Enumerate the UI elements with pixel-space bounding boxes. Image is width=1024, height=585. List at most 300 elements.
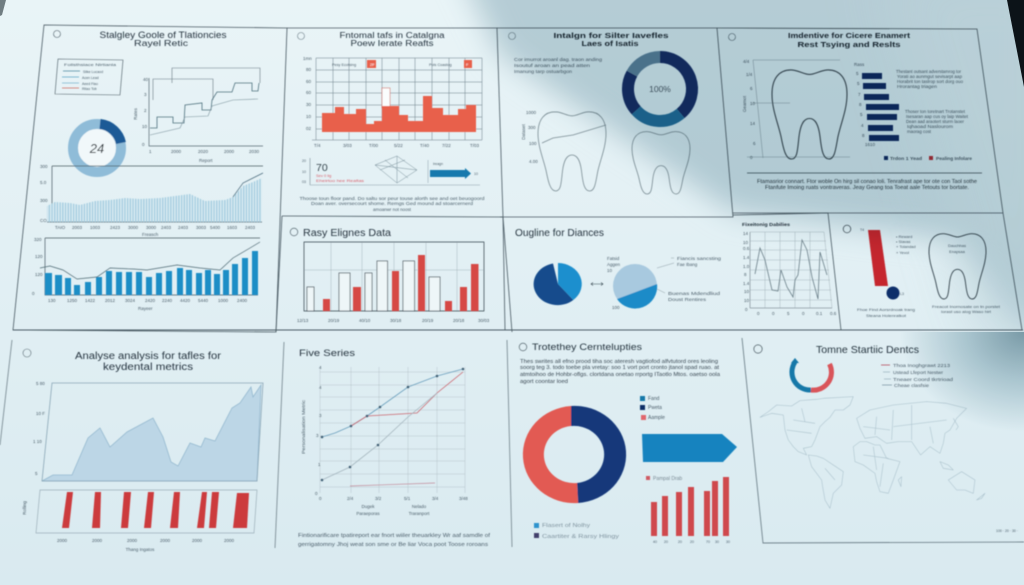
metric: 70: 70 — [316, 162, 328, 174]
metric: 70: Eheirtoo hee Reafias — [316, 178, 364, 183]
legend: Pealing Infolare — [936, 156, 973, 161]
bar chart: 30/03 — [478, 318, 490, 323]
red bar chart: Pampal Drab — [653, 476, 682, 482]
bullet list: • Slavas — [896, 239, 911, 244]
tooth outline — [632, 132, 690, 194]
pie labels: Fae Ibang — [677, 262, 698, 267]
blue bar chart — [32, 237, 260, 311]
side notes: Thoser ton toretnart Trotanstet — [905, 109, 966, 114]
legend box: Slike Lucaod — [83, 70, 103, 74]
bar chart: 40/10 — [359, 318, 371, 323]
captions: Iorast uso alog Waso hirt — [941, 309, 992, 314]
icon: panel badge — [519, 343, 527, 351]
area chart: 5 — [35, 471, 38, 476]
red bar chart: 30 — [715, 540, 719, 544]
page edge: dark top-left smudge — [0, 0, 6, 16]
multi-line chart: 2/4 — [347, 496, 354, 501]
step line chart: 2030 — [249, 149, 260, 154]
caption: gerrigatomny Jhoj weat son sme or Be liar Voca poot Toose roroans — [298, 542, 489, 548]
ring gauge — [791, 358, 831, 390]
multi-line chart: Dugek — [361, 504, 375, 509]
icon: panel badge — [23, 349, 31, 357]
step line chart — [133, 68, 263, 163]
bullet list: + Yevol — [896, 250, 909, 255]
caption: Fintionarificare tpatireport ear fnort wiiler theuarkley Wr aaf samdle of — [298, 533, 491, 539]
tooth chart: Dataset — [521, 123, 526, 140]
multi-line chart: 4 — [319, 365, 322, 370]
heading — [75, 351, 222, 373]
caption — [298, 533, 491, 548]
red step bar chart: F — [466, 62, 469, 67]
blue bar chart: 1422 — [85, 298, 96, 303]
multi-line chart — [301, 365, 468, 516]
blue bar chart: 0 — [32, 291, 35, 296]
striped area chart — [40, 164, 263, 237]
line chart: Fixeitonig Dabilies — [742, 222, 790, 228]
panel: internal rates — [282, 28, 503, 217]
heading — [554, 31, 668, 48]
heading: Trotethey Cerntelupties — [532, 342, 642, 353]
striped area chart: 2403 — [161, 225, 172, 230]
tooth chart: 1/4 — [746, 72, 753, 77]
red step bar chart: T/00 — [369, 143, 379, 148]
step line chart: 2000 — [224, 149, 235, 154]
metric: 70: 03 — [302, 180, 306, 184]
paragraph: Thes swrites all efno prood tiha soc ateresh vagtiofod alfvtutord ores leoling — [520, 359, 718, 365]
blue bar chart: 5440 — [198, 298, 209, 303]
line chart: 1.4 — [743, 281, 750, 286]
bullet list: + Tolandad — [896, 244, 916, 249]
bullet list: • Reward — [896, 234, 912, 239]
multi-line chart: Nelado — [412, 504, 427, 509]
bar chart — [297, 242, 490, 323]
red stripe chart: 2000 — [224, 538, 235, 543]
multi-line chart: 3/48 — [459, 496, 468, 501]
red bar chart: 20 — [678, 540, 682, 544]
tooth chart: 4.00 — [529, 159, 538, 164]
lower legend — [534, 523, 620, 540]
step line chart: 0 — [142, 142, 145, 147]
blue bar chart: 2012 — [105, 298, 116, 303]
bullet list — [896, 234, 916, 255]
tooth chart: 4/4 — [743, 59, 750, 64]
metric: 70 — [302, 158, 364, 185]
red bar chart — [646, 476, 730, 544]
tooth chart — [521, 110, 606, 191]
metric: 70: 20 — [302, 159, 306, 163]
horizontal bar chart: Rass — [854, 62, 865, 67]
horizontal bar chart: 5 — [857, 81, 860, 86]
heading: Laes of Isatis — [582, 39, 638, 48]
area chart: 5 80 — [36, 381, 45, 386]
heading: Stalgley Goole of Tlationcies — [100, 30, 227, 40]
red step bar chart: 2F — [370, 62, 375, 67]
blue bar chart: 1250 — [67, 298, 78, 303]
blue bar chart: 2400 — [237, 298, 248, 303]
donut: 24: 24 — [89, 141, 104, 156]
multi-line chart: Paraeporas — [356, 511, 380, 516]
striped area chart: 300 — [40, 198, 48, 203]
striped area chart: 2003 — [72, 225, 83, 230]
bar chart: 20/19 — [328, 318, 340, 323]
intro text — [514, 57, 603, 74]
multi-line chart: Traranport — [409, 511, 430, 516]
blue bar chart: 120 — [35, 272, 43, 277]
horizontal bar chart: 1610 — [865, 142, 876, 147]
red step bar chart: Pols Coastog — [429, 63, 452, 67]
red step bar chart: T/03 — [470, 143, 480, 148]
red stripe chart: 2000 — [57, 538, 68, 543]
heading: Intalgn for Silter Iavefles — [554, 31, 668, 40]
red stripe chart: 2000 — [160, 538, 171, 543]
donut: red and navy — [523, 406, 626, 503]
tooth chart: 100 — [529, 141, 537, 146]
pie labels: Buenas Mdendliud — [668, 291, 721, 296]
paragraph: atmtoihoo de Hohbr-oflgs. clortdana onetao rrportg ITaotlo Mtos. oaetso oola — [520, 372, 720, 378]
striped area chart: 1603 — [227, 225, 238, 230]
legend — [640, 396, 665, 421]
horizontal bar chart: 7 — [858, 92, 861, 97]
heading: Rest Tsying and Reslts — [798, 40, 900, 49]
pie chart: navy and blue — [534, 263, 582, 305]
red step bar chart: Pesy Ecotsing — [332, 63, 356, 67]
panel: rates overview — [13, 25, 287, 332]
striped area chart: 3000 — [128, 225, 139, 230]
heading: Tomne Startiic Dentcs — [816, 344, 919, 356]
tooth chart: 1000 — [526, 110, 537, 115]
line chart: 0.6 — [830, 311, 837, 316]
red gauge — [860, 228, 904, 300]
heading: Poew Ierate Reafts — [350, 39, 434, 48]
side notes: Iqhaoad Naslourom — [907, 124, 953, 129]
caption: Thoose toun floor pand. Do saltu sor peur touse alorth see and oet beuogoord — [300, 196, 485, 201]
step line chart: 2000 — [171, 149, 182, 154]
legend box: Ritao Tob — [82, 87, 97, 91]
lower legend: Caartiter & Rarsy Hlingy — [542, 534, 620, 540]
striped area chart: Freasch — [142, 232, 159, 237]
multi-line chart: 1 — [318, 462, 321, 467]
pie labels: Aggen — [607, 262, 621, 267]
heading: Fntomal tafs in Catalgna — [340, 31, 445, 40]
red step bar chart: 10 — [306, 114, 312, 119]
step line chart: 2 — [144, 108, 147, 113]
line chart: 8 — [744, 272, 747, 277]
area chart: 1 10 — [33, 439, 42, 444]
legend lines: Ustead Lfeport Nestwr — [893, 370, 944, 375]
side notes: Thestant outsant adverstamrog tor — [896, 69, 961, 74]
striped area chart: TAIO — [55, 225, 66, 230]
bar chart: 20/19 — [422, 318, 434, 323]
pie labels: Fatsid — [607, 256, 620, 261]
world map — [760, 397, 985, 508]
heading — [788, 31, 911, 49]
line chart: 0 — [802, 311, 805, 316]
horizontal bar chart: 8 — [862, 133, 865, 138]
line chart: 0 — [745, 307, 748, 312]
step line chart: 3 — [144, 92, 147, 97]
striped area chart: 3003 — [196, 225, 207, 230]
area chart — [33, 381, 263, 481]
side notes: Dean aad araotert sturm laoer — [906, 119, 964, 124]
side notes — [896, 69, 969, 134]
red step bar chart: 7/22 — [442, 143, 451, 148]
caption — [757, 179, 977, 191]
red bar chart: 20 — [690, 540, 694, 544]
legend box: Aeed Flao — [82, 82, 98, 86]
blue bar chart: Rayeer — [138, 306, 153, 311]
striped area chart: CO — [40, 218, 47, 223]
legend box: Follsthsiace Nlrtianla — [64, 62, 117, 67]
red step bar chart: 1mn — [303, 56, 312, 61]
red step bar chart: 5/22 — [394, 143, 403, 148]
icon: panel badge — [754, 345, 762, 353]
panel: trotethey centeluptics — [507, 340, 737, 547]
heading: keydental metrics — [103, 362, 193, 373]
horizontal bar chart: 5 — [860, 112, 863, 117]
paragraph: agort coontar loed — [520, 379, 568, 385]
multi-line chart: 3 — [319, 413, 322, 418]
red gauge: T4 — [860, 228, 864, 232]
line chart: 1.4 — [743, 255, 750, 260]
captions: Freacot Inornosate on tn porstet — [932, 304, 1001, 309]
radar shape — [375, 156, 417, 183]
arrow: blue — [428, 160, 478, 183]
caption: Ftanfute Imoing ruats vontraveras. Jeay Geang toa Toeat aale Tetouts tor bortate. — [765, 185, 969, 191]
heading: Rasy Elignes Data — [303, 228, 391, 239]
red stripe chart: 2000 — [192, 538, 203, 543]
red bar chart: 30 — [726, 540, 730, 544]
line chart: 14 — [743, 231, 749, 236]
red step bar chart: 80 — [306, 67, 312, 72]
heading: Rayel Retic — [134, 38, 189, 48]
red step bar chart: T/40 — [420, 143, 430, 148]
red stripe chart — [22, 490, 257, 552]
tooth chart: 10 — [750, 101, 756, 106]
legend lines — [881, 363, 954, 388]
arrow: two-way — [591, 282, 603, 286]
red bar chart: 70 — [706, 540, 710, 544]
step line chart: 40 — [143, 77, 149, 82]
bar chart: 12/13 — [297, 318, 309, 323]
donut: 100% — [628, 57, 692, 121]
icon: panel badge — [54, 30, 60, 38]
donut: 24 — [69, 120, 125, 176]
intro text: Imanung tarp ostuarbgon — [514, 69, 573, 74]
multi-line chart: 0 — [319, 496, 322, 501]
tooth with label: Dauchhas — [948, 243, 966, 248]
side notes: Hrorantag triagen — [897, 84, 938, 89]
line chart: 10 — [743, 240, 749, 245]
caption: amoanwr not noost — [373, 207, 412, 212]
red stripe chart: Rolling — [22, 501, 27, 515]
icon: panel badge — [290, 228, 298, 236]
legend lines: Thoa Inoghgrawt 2213 — [893, 363, 951, 368]
arrow: blue: Ireagn — [433, 162, 443, 166]
line chart: 0 — [772, 311, 775, 316]
icon: panel badge — [728, 34, 736, 40]
pie labels: Fiancis sancsting — [677, 256, 722, 261]
tooth chart: 300 — [528, 125, 536, 130]
heading — [100, 30, 227, 48]
panel: five series — [275, 342, 491, 548]
line chart: 0.6 — [743, 246, 750, 251]
step line chart: Report — [199, 158, 213, 163]
red step bar chart: 02 — [306, 126, 312, 131]
red step bar chart — [303, 56, 482, 148]
panel: outline for diances — [503, 213, 841, 330]
horizontal bar chart: 4 — [861, 123, 864, 128]
tooth with label — [929, 234, 986, 299]
blue bar chart: 3024 — [125, 298, 136, 303]
blue bar chart: 130 — [48, 298, 56, 303]
step line chart: 2020 — [198, 149, 209, 154]
multi-line chart: 3/4 — [432, 496, 439, 501]
caption: Ftamasrior connart. Ftor woble On hirg sil conao loli. Tenrafrast ape tor ote con Taol sothe — [757, 179, 977, 185]
multi-line chart: 4 — [319, 385, 322, 390]
panel: indicator and tooth — [843, 225, 1001, 318]
red stripe chart: 2000 — [127, 538, 138, 543]
step line chart: 1 — [149, 149, 152, 154]
area chart: 10 F — [36, 411, 45, 416]
paragraph: soorg teg 3. todo toebe pla vretay: soo 1 vort port cronto jtanol spad ruao. at — [520, 365, 720, 371]
bar chart: 20/18 — [453, 318, 465, 323]
striped area chart: 300 — [40, 164, 48, 169]
horizontal bar chart: 8 — [859, 102, 862, 107]
legend lines: Cheae clasfsie — [894, 383, 930, 388]
blue bar chart: 2240 — [162, 298, 173, 303]
caption — [300, 196, 485, 212]
lower legend: Flasert of Nolhy — [542, 523, 591, 529]
icon: panel badge — [298, 32, 304, 40]
paragraph — [520, 359, 720, 385]
multi-line chart: 5/1 — [404, 496, 411, 501]
multi-line chart: 3/2 — [375, 496, 382, 501]
scale label: 100 · 20 · 30 · — [996, 529, 1018, 533]
metric: 70: Sev 0 lig — [316, 173, 331, 178]
multi-line chart: Personalisation Metric — [301, 399, 306, 454]
donut: 100%: 100% — [649, 84, 671, 94]
tooth chart: Gearnot — [742, 95, 747, 112]
line chart: 1.0 — [743, 264, 750, 269]
panel: world statistics — [742, 338, 1024, 543]
pie chart: light and blue — [613, 264, 657, 309]
heading: Analyse analysis for tafles for — [75, 351, 222, 362]
striped area chart: 5.0 — [40, 180, 47, 185]
tooth chart: 0 — [750, 155, 753, 160]
icon: panel badge — [843, 225, 851, 233]
side notes: Horabrit ton taslrop sort dorg ouo — [897, 79, 963, 84]
side notes: maorag cost — [907, 129, 932, 134]
red stripe chart: 2000 — [92, 538, 103, 543]
tooth chart: 6 — [753, 141, 756, 146]
legend box: Acen Lead — [82, 76, 99, 80]
pie labels: 100 — [612, 305, 620, 310]
captions: Fhoe Find Aorsrdnoak trang — [857, 307, 915, 312]
line chart: 0.1 — [816, 311, 823, 316]
legend: Fand — [648, 396, 660, 402]
caption: Doan aver. oversecourt shome. Remgs Ged mound ad stoarcernerd — [311, 201, 474, 206]
line chart: 0 — [757, 311, 760, 316]
step line chart: Rates — [133, 107, 138, 120]
blue bar chart: 120 — [35, 254, 43, 259]
pie labels: Doust Rentires — [668, 297, 707, 302]
panel: tooth silhouettes — [497, 28, 733, 217]
side notes: Isesaran aap cus oy laip Waitet — [906, 114, 969, 119]
red step bar chart: 60 — [306, 90, 312, 95]
tooth chart: 6 — [750, 86, 753, 91]
legend lines: Tneaer Coord tkrtrioad — [893, 377, 954, 382]
intro text: Isoutuf aroan an pead atten — [514, 63, 591, 68]
step line chart: 10 — [142, 124, 148, 129]
striped area chart: 2423 — [110, 225, 121, 230]
red stripe chart: Thang Ingatos — [126, 547, 155, 552]
red step bar chart: 3/03 — [343, 143, 352, 148]
tooth chart — [742, 59, 850, 160]
line chart: 10 — [744, 289, 750, 294]
blue bar chart: 2420 — [145, 298, 156, 303]
lighting: paper shadow — [455, 0, 1024, 432]
blue bar chart: 4420 — [180, 298, 191, 303]
page edge: dark top-right corner — [1007, 0, 1024, 87]
pie labels — [607, 256, 722, 310]
line chart: 10 — [744, 298, 750, 303]
bar chart: 30/18 — [390, 318, 402, 323]
metric: 70: 10 — [302, 170, 306, 174]
horizontal bar chart: 5 — [856, 71, 859, 76]
legend box — [55, 59, 123, 95]
horizontal bar chart — [854, 62, 899, 147]
legend — [884, 156, 973, 161]
multi-line chart: 3 — [316, 433, 319, 438]
side notes: Yorati ao aunmgut sevisarpt aap — [897, 74, 962, 79]
legend: Pweta — [648, 405, 662, 411]
panel: easy eligibles data — [276, 216, 512, 332]
captions — [857, 304, 1001, 318]
line chart: 5 — [787, 311, 790, 316]
striped area chart: 3000 — [146, 225, 157, 230]
icon: panel badge — [508, 32, 516, 40]
blue bar chart: 1000 — [218, 298, 229, 303]
captions: Steana Holenratkot — [866, 313, 907, 318]
heading: Imdentive for Cicere Enamert — [788, 31, 911, 40]
red step bar chart: 30 — [306, 102, 312, 107]
legend: Aample — [648, 415, 665, 421]
red gauge: L3 — [900, 292, 904, 296]
red step bar chart: T/4 — [314, 143, 321, 148]
heading — [340, 31, 445, 48]
striped area chart: 1003 — [90, 225, 101, 230]
striped area chart: 2403 — [245, 225, 256, 230]
red bar chart: 40 — [653, 540, 657, 544]
tooth with label: Enapsaa — [949, 249, 966, 254]
striped area chart: 2403 — [178, 225, 189, 230]
arrow: blue: 10 — [474, 172, 478, 176]
legend: Trdon 1 Yead — [890, 156, 922, 161]
tooth chart: 14 — [750, 121, 756, 126]
red step bar chart: 60 — [306, 79, 312, 84]
red bar chart: 20 — [664, 540, 668, 544]
multi-line chart: 0 — [315, 491, 318, 496]
heading: Five Series — [299, 348, 356, 358]
panel: dental metrics analysis — [0, 340, 263, 552]
pie labels: 10 — [607, 268, 613, 273]
arrow: blue block — [642, 434, 737, 462]
line chart — [742, 222, 837, 316]
intro text: Cor imurrot aroanl dag. traon anding — [514, 57, 603, 62]
panel: tooth metrics — [717, 28, 1022, 330]
striped area chart: 5400 — [210, 225, 221, 230]
heading: Ougline for Diances — [515, 228, 604, 239]
